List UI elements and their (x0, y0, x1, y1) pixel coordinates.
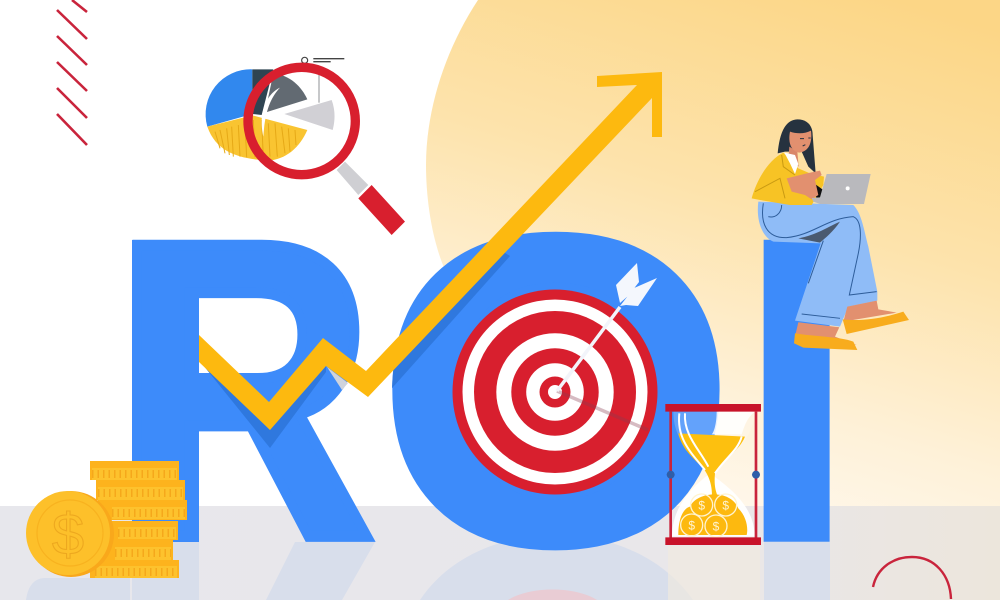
target (452, 263, 658, 494)
grey pie sector (265, 73, 307, 113)
dart shadow (557, 391, 648, 430)
magnifier with pie chart (206, 57, 405, 235)
frame bars (665, 404, 761, 545)
facial features (800, 138, 811, 146)
blue pie sector (206, 69, 252, 127)
hair (778, 119, 816, 173)
shoes (843, 312, 909, 334)
background sun circle (426, 0, 1000, 506)
decorative red hatch lines (57, 0, 87, 145)
money pile (678, 494, 747, 535)
glass outline (679, 413, 742, 473)
bar highlights (92, 468, 185, 578)
skin ankles (795, 301, 897, 345)
bar ticks (92, 474, 185, 572)
hourglass: $ (698, 498, 705, 512)
hourglass: $ (688, 518, 695, 532)
dart (557, 307, 620, 391)
large coin (26, 491, 110, 575)
coin stack: $ (52, 502, 84, 567)
jeans shadow (798, 222, 840, 243)
pale pie slice (284, 100, 335, 130)
dollar coins (681, 494, 737, 537)
pointer line (317, 73, 320, 103)
highlight crescent (262, 88, 280, 137)
floor (0, 506, 1000, 600)
frame posts (671, 412, 756, 538)
floor reflections (26, 542, 830, 600)
large coin rim (28, 491, 114, 577)
laptop (812, 174, 871, 204)
neck (788, 147, 799, 167)
lens ring (248, 67, 355, 175)
shirt (784, 153, 798, 174)
jacket (752, 153, 824, 205)
sand top (678, 433, 745, 502)
chart arrow (199, 72, 662, 448)
coin bars (90, 461, 179, 480)
woman with laptop (752, 119, 909, 350)
coin stack (26, 461, 187, 578)
foreground layer (26, 56, 909, 578)
jacket seams (755, 155, 795, 198)
hourglass (665, 404, 761, 545)
jeans seams (763, 203, 877, 318)
hands (787, 171, 822, 199)
decorative red arc (873, 557, 951, 599)
yellow pie sector (207, 115, 307, 161)
yellow pie texture (215, 120, 296, 158)
face (789, 131, 811, 153)
heading letters ROI (112, 140, 860, 600)
red handle (358, 185, 405, 235)
jeans (758, 202, 877, 327)
label marker (302, 57, 344, 63)
glass bulb upper (673, 412, 755, 473)
dark pie sector (252, 69, 273, 115)
glass bulb lower (672, 473, 755, 537)
handle neck (337, 162, 368, 195)
hourglass: $ (722, 498, 729, 512)
phone dark detail (815, 184, 823, 198)
hourglass: $ (713, 519, 720, 533)
laptop logo (846, 186, 850, 190)
